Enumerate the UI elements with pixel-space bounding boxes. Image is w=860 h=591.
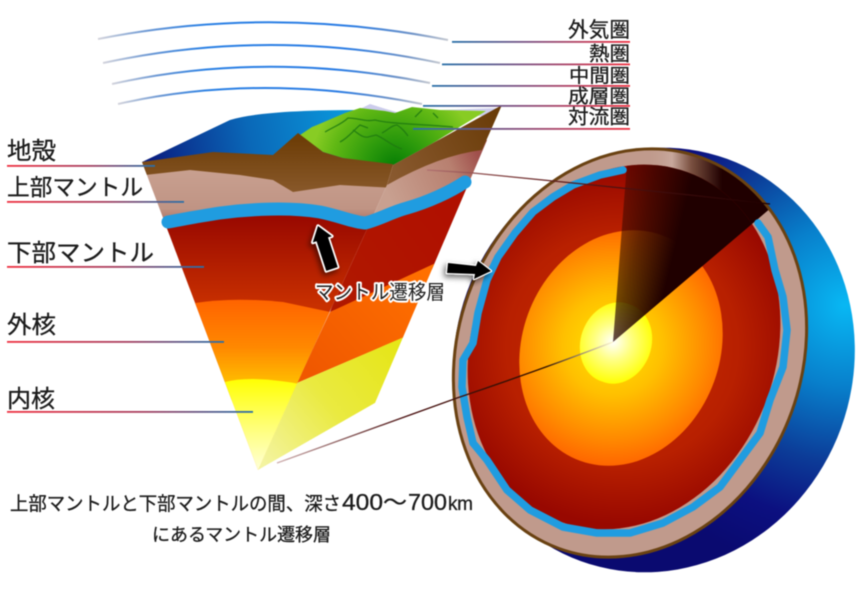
right labels: atmosphere layers: 成層圏 — [568, 86, 630, 108]
callout: mantle transition zone: マントル遷移層 — [315, 281, 445, 304]
left labels: Earth layers: 下部マントル — [7, 240, 154, 267]
caption: にあるマントル遷移層 — [152, 525, 331, 545]
caption: 〜 — [383, 490, 407, 515]
blue transition zone line on disk — [462, 170, 787, 533]
right labels: atmosphere layers — [568, 19, 630, 128]
right labels: atmosphere layers: 対流圏 — [568, 106, 630, 128]
blue mantle transition zone band — [168, 182, 465, 223]
snow peaks — [358, 104, 498, 116]
caption — [10, 489, 473, 545]
green land surface — [300, 107, 486, 166]
left label leader lines — [7, 165, 253, 413]
brown crust outline — [453, 149, 807, 557]
blue outer shell of the globe — [453, 148, 855, 572]
inner core yellow disk — [580, 302, 652, 384]
arrow: pointing up to transition zone — [313, 226, 338, 271]
right labels: atmosphere layers: 外気圏 — [568, 19, 630, 42]
sphere: cut-away globe — [453, 140, 855, 572]
arrow: pointing right to sphere transition zone — [447, 261, 491, 279]
atmosphere arcs — [98, 22, 448, 104]
dark cut-out wedge — [612, 164, 752, 342]
right labels: atmosphere layers: 中間圏 — [569, 65, 630, 87]
left labels: Earth layers: 上部マントル — [7, 174, 143, 200]
right labels: atmosphere layers: 熱圏 — [589, 42, 630, 66]
pink mantle ring — [453, 149, 807, 557]
right label leader lines — [413, 41, 630, 130]
caption: 上部マントルと下部マントルの間、深さ — [10, 493, 341, 515]
left labels: Earth layers: 地殻 — [7, 138, 56, 165]
connector line from wedge tip to sphere centre — [277, 342, 613, 463]
caption: 700 — [408, 489, 447, 515]
right face layers — [258, 105, 510, 470]
left labels: Earth layers: 内核 — [7, 386, 55, 413]
left labels: Earth layers — [7, 138, 154, 413]
lower mantle red disk — [468, 165, 780, 529]
caption: km — [448, 494, 473, 515]
wedge over ring — [664, 152, 769, 224]
caption: 400 — [342, 489, 383, 515]
connector line from upper mantle to sphere — [427, 170, 770, 204]
cross-section wedge of the Earth — [141, 104, 502, 470]
mountain ridges — [325, 110, 453, 149]
left face layers — [142, 132, 394, 470]
ocean surface — [142, 110, 400, 165]
left labels: Earth layers: 外核 — [7, 312, 56, 339]
outer core orange disk — [519, 230, 723, 466]
